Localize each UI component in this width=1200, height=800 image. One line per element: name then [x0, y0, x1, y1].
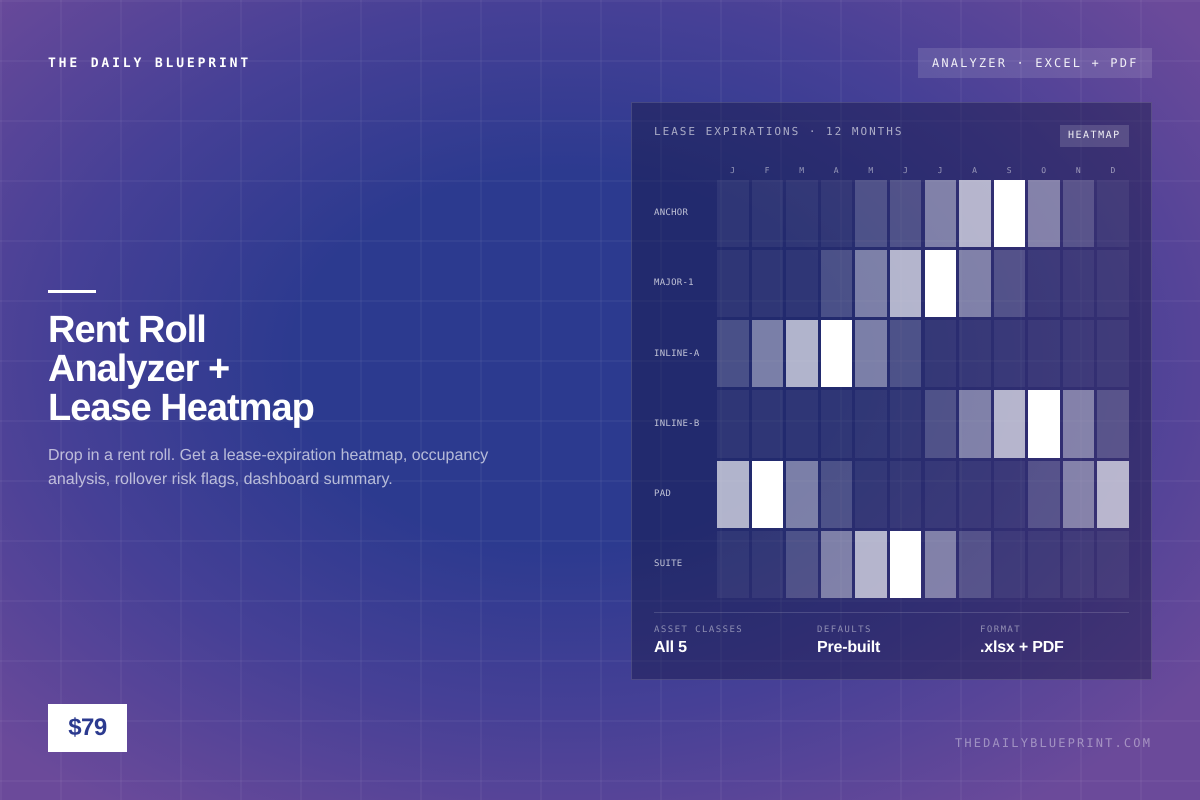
- heatmap row: major-1: [717, 250, 1129, 317]
- month labels: [730, 166, 1115, 175]
- stat: defaults: [817, 625, 880, 656]
- month labels: J: [730, 166, 735, 175]
- title: [48, 309, 314, 429]
- month labels: M: [799, 166, 804, 175]
- month labels: N: [1076, 166, 1081, 175]
- panel: lease heatmap: [631, 102, 1152, 680]
- price badge: $79: [68, 714, 107, 741]
- tag: analyzer format: [918, 48, 1152, 78]
- month labels: J: [903, 166, 908, 175]
- heatmap row: anchor: [717, 180, 1129, 247]
- stat: format: FORMAT: [980, 625, 1021, 635]
- description: [48, 447, 488, 488]
- website url: THEDAILYBLUEPRINT.COM: [955, 736, 1152, 750]
- brand name: THE DAILY BLUEPRINT: [48, 56, 251, 71]
- footer divider: [654, 612, 1129, 613]
- month labels: A: [834, 166, 839, 175]
- row label: inline-a: INLINE-A: [654, 349, 700, 359]
- stat: defaults: DEFAULTS: [817, 625, 872, 635]
- accent rule: [48, 290, 96, 293]
- title: Lease Heatmap: [48, 387, 314, 429]
- panel heading: LEASE EXPIRATIONS · 12 MONTHS: [654, 125, 903, 138]
- month labels: M: [868, 166, 873, 175]
- title: Analyzer +: [48, 348, 229, 390]
- month labels: A: [972, 166, 977, 175]
- month labels: D: [1110, 166, 1115, 175]
- price badge: [48, 704, 127, 752]
- row label: pad: PAD: [654, 489, 671, 499]
- stat: asset classes: ASSET CLASSES: [654, 625, 743, 635]
- row label: anchor: ANCHOR: [654, 208, 688, 218]
- month labels: S: [1007, 166, 1012, 175]
- month labels: O: [1041, 166, 1046, 175]
- stat: asset classes: [654, 625, 743, 656]
- row label: major-1: MAJOR-1: [654, 278, 694, 288]
- stat: asset classes: All 5: [654, 639, 687, 656]
- month labels: F: [765, 166, 770, 175]
- stat: format: .xlsx + PDF: [980, 639, 1064, 656]
- description: Drop in a rent roll. Get a lease-expiration heatmap, occupancy: [48, 447, 488, 464]
- heatmap tag: HEATMAP: [1068, 130, 1121, 141]
- stat: defaults: Pre-built: [817, 639, 880, 656]
- row label: inline-b: INLINE-B: [654, 419, 700, 429]
- description: analysis, rollover risk flags, dashboard summary.: [48, 471, 393, 488]
- title: Rent Roll: [48, 309, 206, 351]
- heatmap row: suite: [717, 531, 1129, 598]
- heatmap row: inline-b: [717, 390, 1129, 458]
- heatmap row: pad: [717, 461, 1129, 528]
- heatmap row: inline-a: [717, 320, 1129, 387]
- month labels: J: [938, 166, 942, 175]
- tag: analyzer format: ANALYZER · EXCEL + PDF: [932, 56, 1138, 70]
- heatmap tag: [1060, 125, 1129, 147]
- row label: suite: SUITE: [654, 559, 682, 569]
- stat: format: [980, 625, 1064, 656]
